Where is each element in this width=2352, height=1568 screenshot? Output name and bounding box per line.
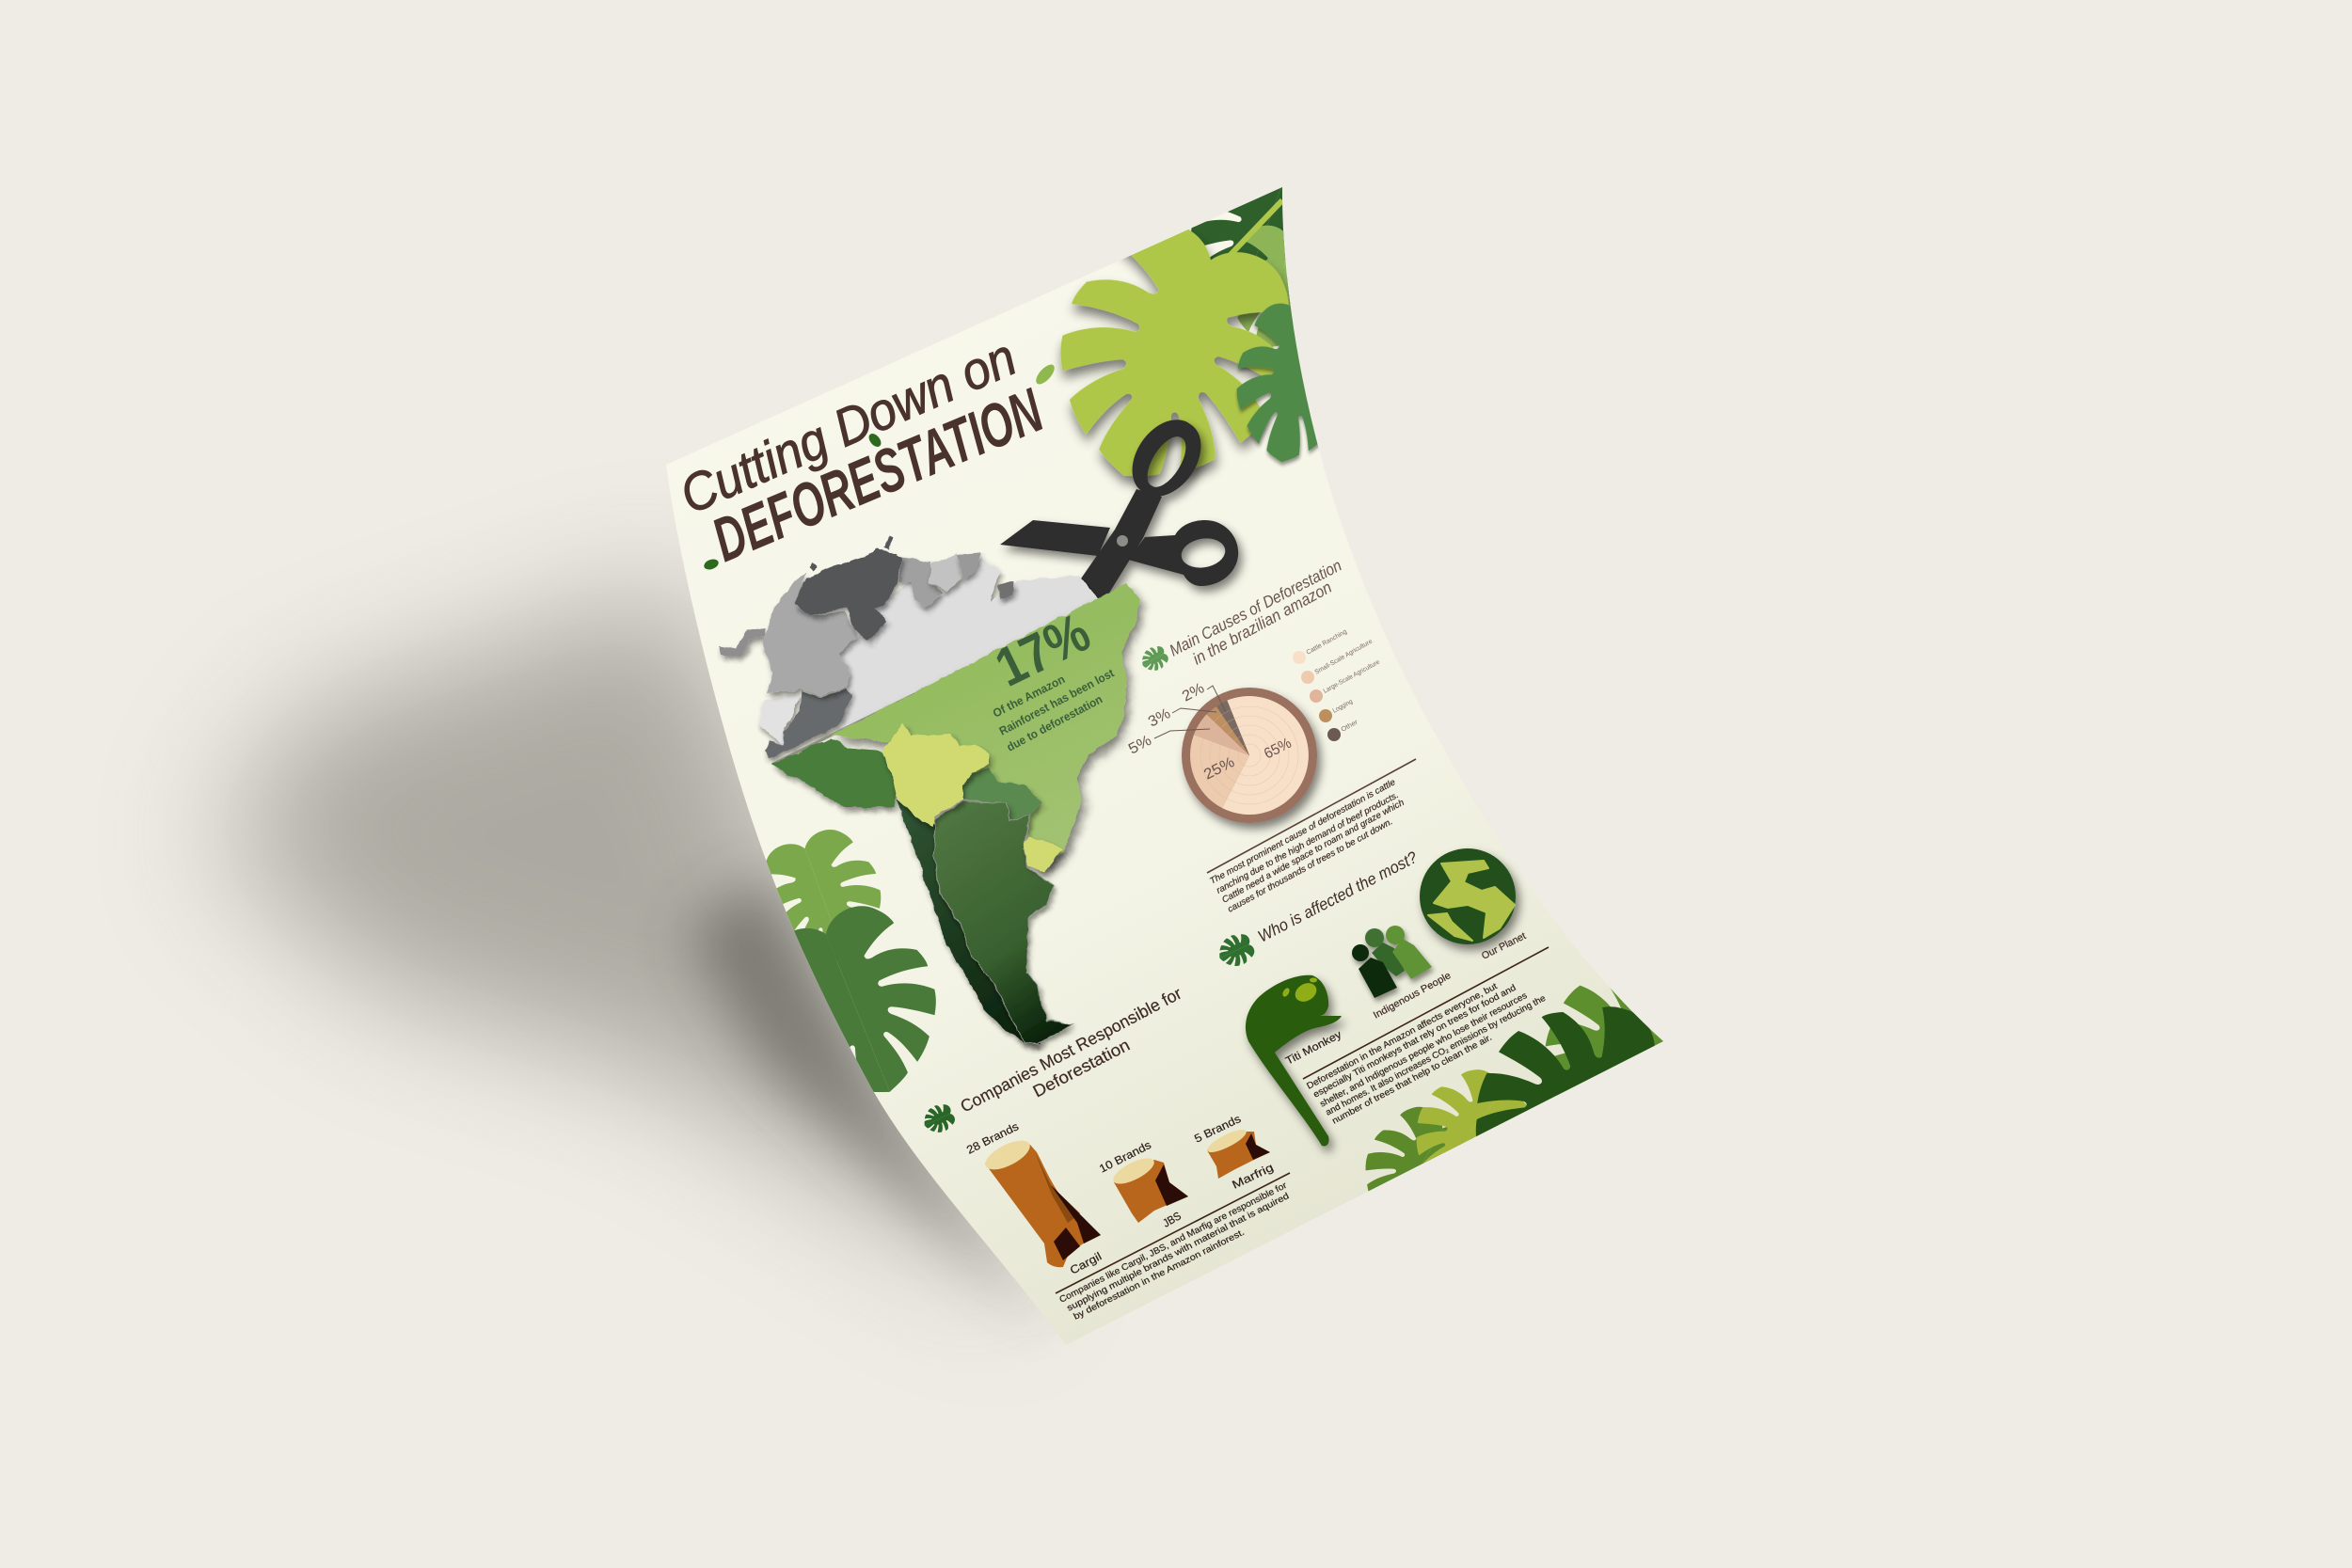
legend: Cattle Ranching <box>1306 628 1348 657</box>
pie labels: 25% <box>1201 754 1237 784</box>
region: yellow small <box>1024 836 1063 872</box>
panel: main causes <box>1126 556 1416 915</box>
cast shadow of the poster <box>216 583 1049 1326</box>
heading line 1: Companies Most Responsible for <box>958 984 1184 1117</box>
panel: companies <box>919 984 1291 1323</box>
icon: monkey <box>1246 975 1342 1147</box>
bark <box>1182 688 1317 823</box>
region: small north island <box>809 536 897 570</box>
title <box>672 326 1057 575</box>
leaf: dark green <box>794 906 936 1092</box>
divider <box>1303 947 1549 1079</box>
map: grey cut-away part <box>720 536 1101 759</box>
handle right <box>1128 520 1238 586</box>
legend: Logging <box>1332 698 1354 715</box>
pie labels <box>1126 680 1295 784</box>
stump labels: 5 Brands <box>1192 1112 1243 1146</box>
bottom right leaves <box>1342 941 1736 1250</box>
icon: leaf <box>1213 929 1258 973</box>
lower blade and arm <box>1052 489 1162 621</box>
left leaves <box>766 830 936 1092</box>
tree rings <box>1200 706 1298 804</box>
slice 65 percent <box>1222 696 1309 815</box>
slice 2 percent <box>1216 701 1249 755</box>
leaf stem <box>1229 198 1283 254</box>
stump: Marfrig <box>1205 1126 1270 1179</box>
title line 2: DEFORESTATION <box>703 374 1053 575</box>
slice 25 percent <box>1190 735 1249 808</box>
paragraph: causes: Cattle need a wide space to roam and graze which <box>1220 798 1406 906</box>
region: isthmus <box>720 627 765 656</box>
pie labels: 2% <box>1180 680 1207 705</box>
map: green coloured part <box>771 583 1140 1044</box>
leaf: mid green right <box>1545 986 1663 1096</box>
paragraph: companies: Companies like Cargil, JBS, and Marfig are responsible for <box>1057 1180 1289 1306</box>
leaf: large lime <box>1055 229 1292 491</box>
region: yellow centre <box>882 722 990 827</box>
stump labels: JBS <box>1161 1209 1184 1230</box>
blade left <box>1000 520 1110 556</box>
leaf: lime <box>1417 1069 1529 1164</box>
pie labels: 65% <box>1262 736 1295 763</box>
region: long narrow west <box>896 799 1041 1044</box>
handle top <box>1133 420 1200 497</box>
poster sheet <box>666 187 1663 1345</box>
legend: Small-Scale Agriculture <box>1314 639 1374 676</box>
pie chart: tree stump <box>1182 688 1317 823</box>
pivot screw <box>1117 535 1128 546</box>
stump labels: 28 Brands <box>964 1119 1021 1157</box>
paragraph: causes: ranching due to the high demand of beef products. <box>1215 790 1401 896</box>
icon: leaf <box>1137 642 1171 675</box>
region: mid green <box>962 768 1042 821</box>
region: pale east <box>929 553 962 591</box>
heading line 2: Deforestation <box>1030 1036 1133 1101</box>
paragraph: affected: especially Titi monkeys that rely on trees for food and <box>1311 983 1518 1101</box>
region: darkest north <box>795 548 903 641</box>
region: light grey <box>837 558 1101 734</box>
stump labels <box>964 1112 1276 1277</box>
region: mid grey east <box>957 553 980 580</box>
pie labels: 5% <box>1126 733 1154 758</box>
region: small grey <box>997 581 1014 599</box>
caption line 2: Rainforest has been lost <box>997 666 1117 738</box>
leaf: dark green <box>1191 187 1291 316</box>
title leaf: light <box>1033 361 1057 388</box>
stump: Cargil <box>981 1134 1101 1267</box>
region: pale south <box>759 693 800 746</box>
title leaf: lower dark <box>703 558 720 571</box>
region: grey west <box>762 572 858 696</box>
region: dark green west <box>771 738 897 807</box>
paragraph: causes: The most prominent cause of deforestation is cattle <box>1208 777 1397 887</box>
paragraph: affected: shelter, and Indigenous people who lose their resources <box>1318 990 1529 1110</box>
title leaf: small dark <box>866 432 883 449</box>
stump labels: Cargil <box>1068 1249 1104 1277</box>
top right leaves <box>1055 187 1319 491</box>
label: Titi Monkey: Titi Monkey <box>1284 1029 1343 1068</box>
scissors <box>1000 420 1238 621</box>
paragraph: affected: Deforestation in the Amazon affects everyone, but <box>1305 981 1500 1092</box>
heading: Who is affected the most? <box>1255 847 1421 946</box>
paragraph: companies: supplying multiple brands with material that is aquired <box>1065 1191 1291 1314</box>
panel: who is affected <box>1213 847 1549 1147</box>
leaf: dark wide <box>1438 977 1704 1232</box>
paragraph: companies: by deforestation in the Amazon rainforest. <box>1072 1227 1247 1323</box>
legend <box>1293 628 1381 741</box>
region: large dark south <box>934 802 1073 1044</box>
paragraph: affected: number of trees that help to clean the air. <box>1330 1033 1494 1127</box>
icon: leaf <box>919 1101 958 1138</box>
icon: people <box>1352 926 1432 998</box>
label: Our Planet: Our Planet <box>1480 930 1528 962</box>
leader lines <box>1154 686 1226 738</box>
slice 3 percent <box>1206 706 1249 755</box>
caption line 3: due to deforestation <box>1005 692 1104 754</box>
heading line 2: in the brazilian amazon <box>1189 578 1335 669</box>
title line 1: Cutting Down on <box>672 326 1025 525</box>
icon: earth <box>1420 848 1516 944</box>
region: light green <box>831 583 1140 872</box>
leaf: mid green lower <box>1366 1106 1473 1191</box>
label: Indigenous People: Indigenous People <box>1372 970 1453 1022</box>
callout: 17 percent <box>986 602 1117 754</box>
region: slate south <box>765 689 851 759</box>
slice 5 percent <box>1194 714 1249 755</box>
leaf: mid green <box>766 830 881 961</box>
poster mockup scene <box>175 187 1663 1345</box>
pie labels: 3% <box>1146 705 1173 731</box>
leaf: medium green <box>1235 303 1319 467</box>
divider <box>1056 1173 1290 1293</box>
big figure: 17% <box>986 602 1099 699</box>
paragraph: causes: causes for thousands of trees to be cut down. <box>1226 816 1394 915</box>
legend: Other <box>1341 719 1359 734</box>
legend: Large-Scale Agriculture <box>1323 659 1381 695</box>
divider <box>1207 759 1416 873</box>
leaf: pale green back <box>1237 226 1295 347</box>
cut edge <box>773 590 1126 764</box>
paragraph: affected: and homes. It also increases CO₂ emissions by reducing the <box>1324 993 1548 1118</box>
stump: JBS <box>1110 1153 1188 1223</box>
region: grey east <box>898 557 944 609</box>
stump labels: Marfrig <box>1230 1161 1276 1192</box>
heading line 1: Main Causes of Deforestation <box>1167 556 1344 660</box>
caption line 1: Of the Amazon <box>991 673 1067 721</box>
stump labels: 10 Brands <box>1097 1138 1153 1176</box>
